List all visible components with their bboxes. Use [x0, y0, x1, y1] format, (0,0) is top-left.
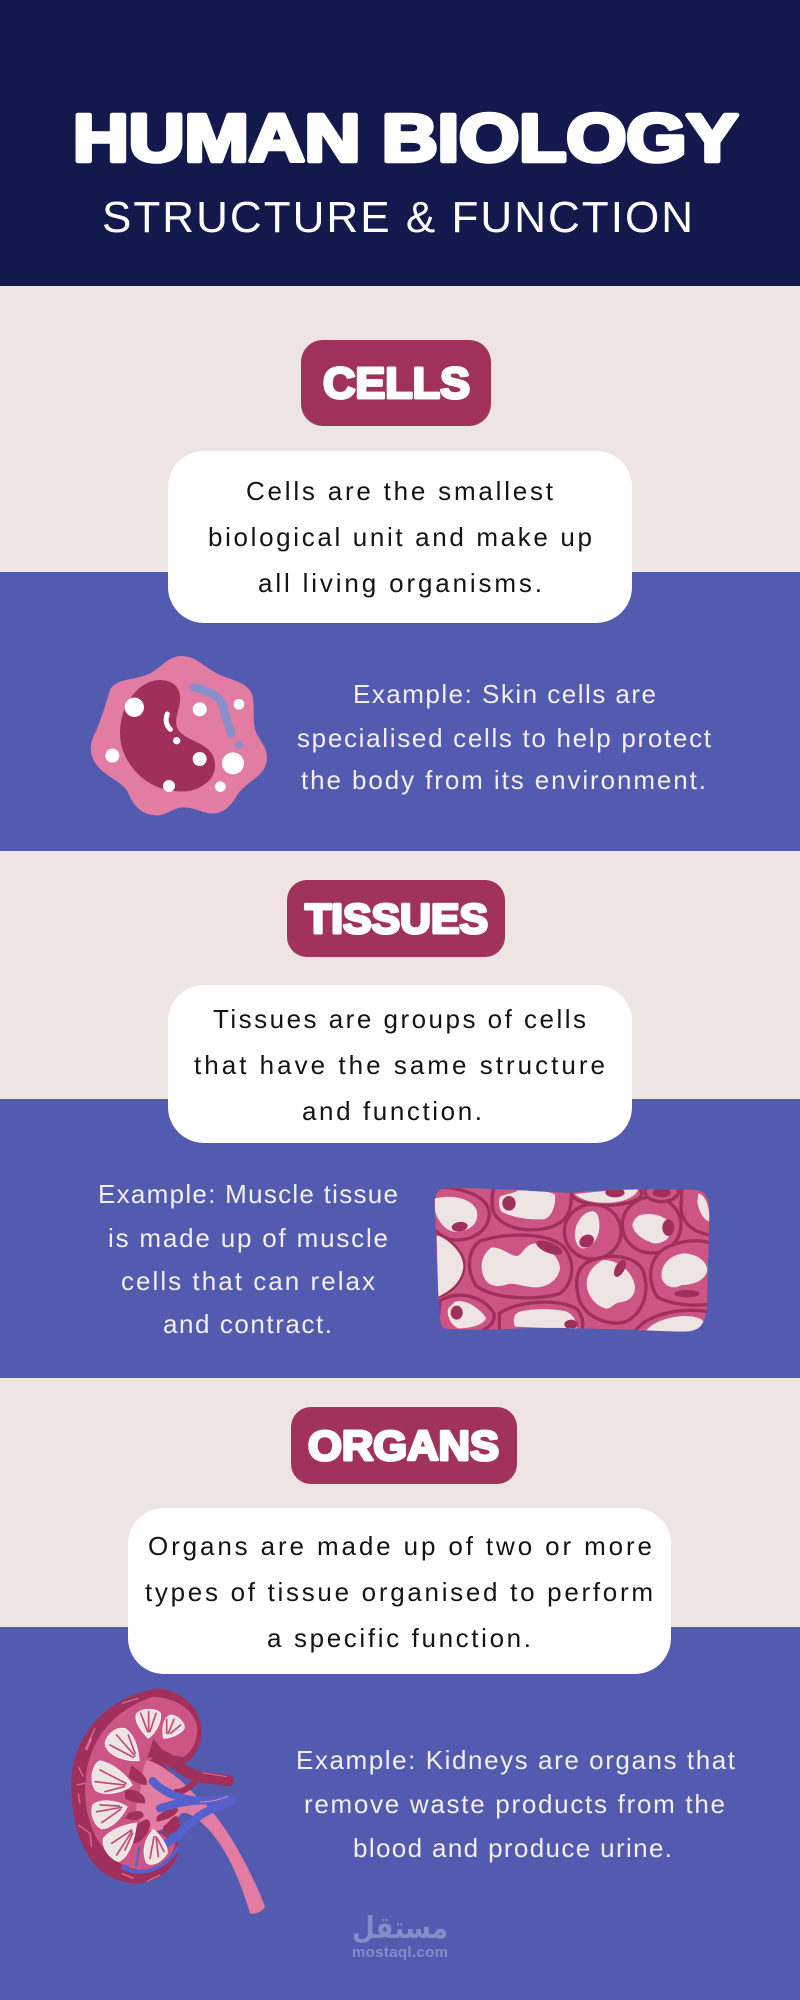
heading: tissues — [287, 880, 505, 957]
text: organs example: blood and produce urine. — [353, 1833, 672, 1863]
text: tissues example — [98, 1179, 398, 1339]
card: cells definition: Cells are the smallest — [246, 476, 554, 506]
text: tissues example: Example: Muscle tissue — [98, 1179, 398, 1209]
card: organs definition: a specific function. — [267, 1623, 531, 1653]
band: organs example background — [0, 1627, 800, 2000]
card: organs definition — [128, 1508, 671, 1674]
text: cells example: specialised cells to help protect — [297, 723, 712, 753]
card: organs definition: Organs are made up of two or more — [148, 1531, 652, 1561]
card: tissues definition: and function. — [302, 1096, 482, 1126]
section: organs — [71, 1407, 736, 1914]
text: cells example: Example: Skin cells are — [353, 679, 656, 709]
section: tissues — [98, 880, 717, 1339]
watermark: mostaql logo: mostaql.com — [352, 1944, 448, 1961]
card: cells definition: biological unit and make up — [208, 522, 592, 552]
icon: kidney — [71, 1688, 265, 1914]
heading: cells: CELLS — [323, 359, 470, 408]
text: tissues example: and contract. — [163, 1309, 332, 1339]
card: organs definition: types of tissue organised to perform — [145, 1577, 653, 1607]
heading: organs: ORGANS — [308, 1422, 499, 1469]
icon: skin cell — [91, 656, 267, 815]
icon: muscle tissue — [434, 1188, 710, 1332]
text: tissues example: is made up of muscle — [108, 1223, 388, 1253]
text: organs example — [296, 1745, 736, 1863]
heading: organs — [291, 1407, 517, 1484]
watermark: mostaql logo — [352, 1911, 448, 1961]
card: tissues definition — [168, 985, 632, 1143]
ureter and pelvis — [142, 1760, 265, 1914]
band: cells example background — [0, 572, 800, 851]
title: HUMAN BIOLOGY — [73, 101, 738, 176]
card: tissues definition: that have the same structure — [194, 1050, 605, 1080]
header panel — [0, 0, 800, 286]
subtitle: STRUCTURE & FUNCTION — [102, 193, 693, 242]
text: organs example: remove waste products from the — [304, 1789, 725, 1819]
heading: tissues: TISSUES — [305, 895, 488, 942]
text: organs example: Example: Kidneys are organs that — [296, 1745, 736, 1775]
text: cells example — [297, 679, 712, 795]
card: cells definition: all living organisms. — [258, 568, 542, 598]
section: cells — [91, 340, 712, 815]
text: tissues example: cells that can relax — [121, 1266, 375, 1296]
text: cells example: the body from its environment. — [301, 765, 706, 795]
watermark: mostaql logo: مستقل — [352, 1911, 448, 1946]
card: cells definition — [168, 451, 632, 623]
heading: cells — [301, 340, 491, 426]
card: tissues definition: Tissues are groups of cells — [213, 1004, 586, 1034]
band: tissues example background — [0, 1099, 800, 1378]
